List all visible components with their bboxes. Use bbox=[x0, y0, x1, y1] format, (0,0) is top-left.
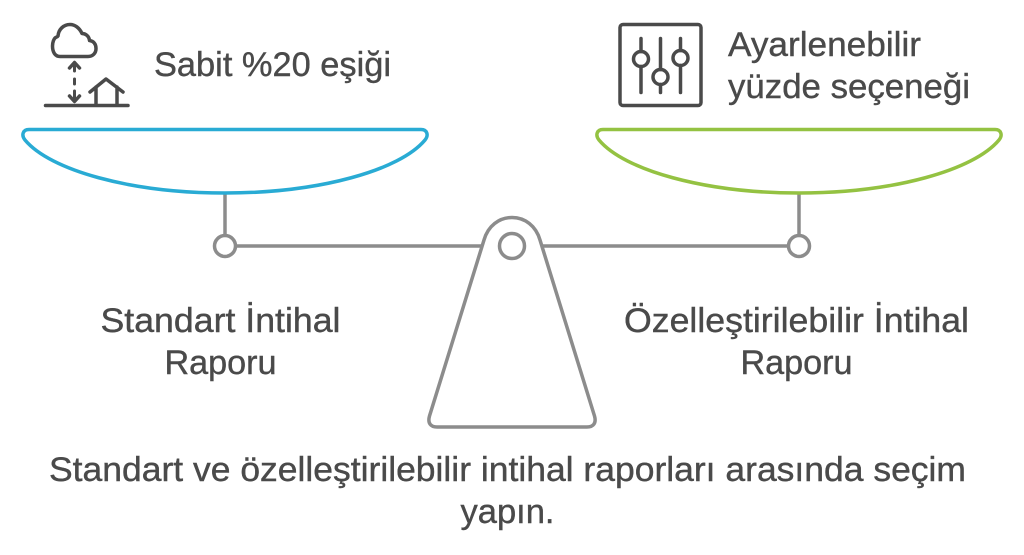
caption: Standart ve özelleştirilebilir intihal raporları arasında seçim bbox=[49, 451, 966, 489]
label: customizable plagiarism report: Raporu bbox=[740, 344, 852, 382]
right pan bbox=[597, 130, 1001, 193]
icon: cloud and house with distance arrow bbox=[46, 24, 128, 106]
label: adjustable percentage option bbox=[728, 26, 970, 106]
label: standard plagiarism report: Raporu bbox=[164, 344, 276, 382]
left pan bbox=[23, 130, 427, 193]
label: adjustable percentage option: yüzde seçeneği bbox=[728, 68, 970, 106]
right pan hanger bbox=[788, 193, 810, 256]
label: customizable plagiarism report bbox=[624, 301, 969, 382]
caption: yapın. bbox=[460, 493, 554, 531]
label: standard plagiarism report bbox=[100, 301, 340, 382]
label: customizable plagiarism report: Özelleştirilebilir İntihal bbox=[624, 301, 969, 340]
caption bbox=[49, 451, 966, 531]
label: fixed threshold: Sabit %20 eşiği bbox=[154, 46, 391, 84]
label: adjustable percentage option: Ayarlenebilir bbox=[728, 26, 921, 64]
icon: adjustment sliders bbox=[620, 24, 701, 106]
scale beam bbox=[236, 244, 788, 248]
label: standard plagiarism report: Standart İntihal bbox=[100, 301, 340, 340]
left pan hanger bbox=[214, 193, 236, 256]
scale fulcrum bbox=[429, 218, 595, 427]
